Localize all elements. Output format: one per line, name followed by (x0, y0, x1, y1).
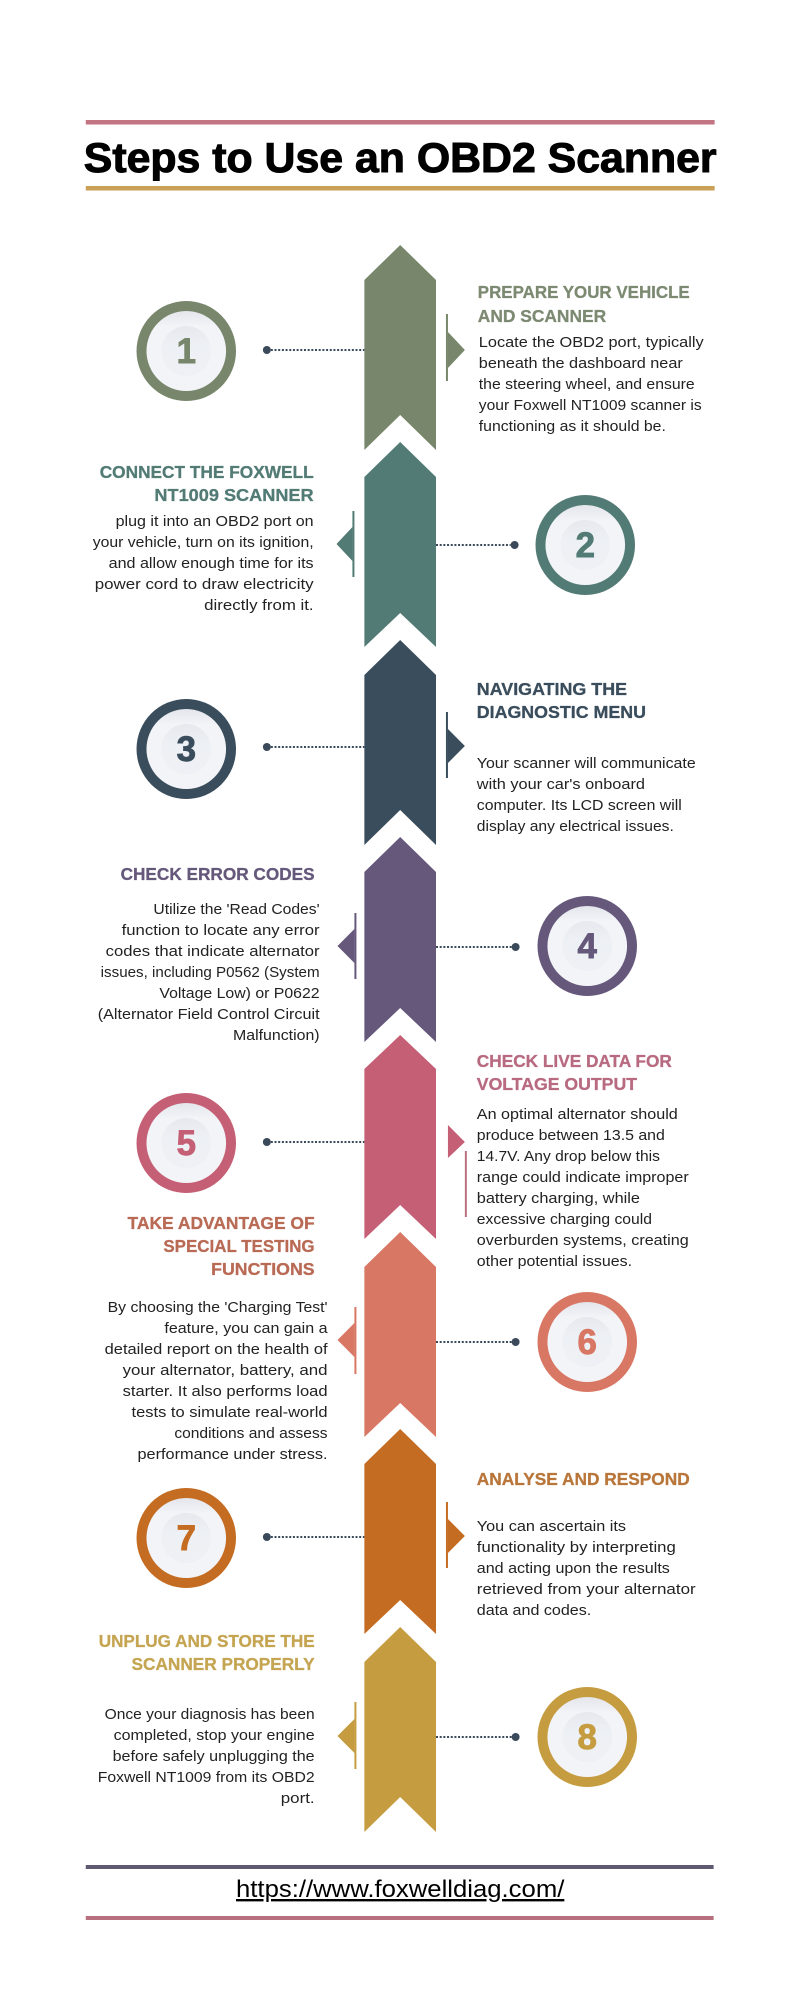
heading 1: PREPARE YOUR VEHICLE (478, 282, 690, 302)
body 8: before safely unplugging the (113, 1748, 315, 1765)
body 8: Once your diagnosis has been (105, 1706, 315, 1723)
body 3: with your car's onboard (476, 776, 645, 793)
number badge 3 (137, 699, 236, 799)
connector 3 (263, 743, 364, 751)
pointer 5 (448, 1125, 467, 1217)
pointer 3 (446, 712, 465, 778)
body 5: other potential issues. (477, 1253, 632, 1270)
body 4: Utilize the 'Read Codes' (153, 901, 320, 918)
body 3 (476, 755, 696, 835)
number badge 8: 8 (578, 1718, 597, 1757)
body 6: detailed report on the health of (105, 1341, 328, 1358)
body 3: display any electrical issues. (477, 818, 674, 835)
body 4: codes that indicate alternator (106, 943, 320, 960)
step 3 panel (137, 640, 696, 845)
body 4: function to locate any error (122, 922, 320, 939)
body 2: plug it into an OBD2 port on (116, 513, 314, 530)
top rule (86, 120, 715, 124)
body 5: An optimal alternator should (477, 1106, 678, 1123)
body 2: directly from it. (204, 597, 314, 614)
body 7: You can ascertain its (477, 1518, 626, 1535)
heading 3: NAVIGATING THE (477, 679, 627, 699)
number badge 7: 7 (177, 1519, 196, 1558)
body 5: overburden systems, creating (477, 1232, 689, 1249)
body 8: completed, stop your engine (114, 1727, 315, 1744)
title: Steps to Use an OBD2 Scanner (84, 134, 717, 181)
body 8: Foxwell NT1009 from its OBD2 (98, 1769, 315, 1786)
connector 2 (436, 541, 519, 549)
body 6: your alternator, battery, and (123, 1362, 328, 1379)
pointer 7 (446, 1502, 465, 1568)
chevron 6 (364, 1232, 436, 1437)
connector 8 (436, 1733, 520, 1741)
body 1: Locate the OBD2 port, typically (479, 334, 704, 351)
number badge 5: 5 (177, 1124, 196, 1163)
body 7: and acting upon the results (477, 1560, 670, 1577)
body 4 (98, 901, 320, 1044)
connector 6 (436, 1338, 520, 1346)
chevron 5 (364, 1035, 436, 1239)
pointer 4 (338, 913, 356, 979)
number badge 1 (137, 301, 236, 401)
body 7 (477, 1518, 696, 1619)
heading 2 (100, 462, 314, 505)
body 6: tests to simulate real-world (132, 1404, 328, 1421)
body 6: By choosing the 'Charging Test' (108, 1299, 328, 1316)
number badge 6 (538, 1292, 637, 1392)
heading 6 (128, 1213, 315, 1279)
body 2: and allow enough time for its (109, 555, 314, 572)
number badge 3: 3 (177, 730, 196, 769)
connector 5 (263, 1138, 364, 1146)
footer bottom rule (86, 1916, 714, 1920)
heading 2: NT1009 SCANNER (154, 485, 314, 505)
heading 8: UNPLUG AND STORE THE (99, 1631, 315, 1651)
infographic content (84, 120, 717, 1920)
connector 4 (436, 943, 520, 951)
body 7: data and codes. (477, 1602, 591, 1619)
body 5: 14.7V. Any drop below this (477, 1148, 660, 1165)
body 5: excessive charging could (477, 1211, 652, 1228)
body 6: starter. It also performs load (123, 1383, 328, 1400)
number badge 6: 6 (578, 1323, 597, 1362)
body 6: feature, you can gain a (164, 1320, 328, 1337)
body 1: beneath the dashboard near (479, 355, 683, 372)
body 5: produce between 13.5 and (477, 1127, 665, 1144)
heading 5: VOLTAGE OUTPUT (477, 1074, 637, 1094)
number badge 7 (137, 1488, 236, 1588)
heading 6: TAKE ADVANTAGE OF (128, 1213, 315, 1233)
connector 1 (263, 346, 364, 354)
heading 8: SCANNER PROPERLY (132, 1654, 315, 1674)
pointer 2 (337, 511, 354, 577)
step 4 panel (98, 837, 637, 1044)
step 8 panel (98, 1627, 637, 1832)
heading 8 (99, 1631, 315, 1674)
pointer 8 (338, 1702, 356, 1769)
step 1 panel (137, 245, 704, 450)
body 4: issues, including P0562 (System (101, 964, 320, 981)
chevron 7 (364, 1429, 436, 1634)
number badge 1: 1 (177, 332, 196, 371)
body 5: battery charging, while (477, 1190, 640, 1207)
header: title block (84, 120, 717, 190)
step 5 panel (137, 1035, 689, 1270)
heading 3 (477, 679, 646, 722)
chevron 1 (364, 245, 436, 450)
body 3: Your scanner will communicate (477, 755, 696, 772)
number badge 2 (536, 495, 635, 595)
number badge 5 (137, 1093, 236, 1193)
body 4: Malfunction) (233, 1027, 320, 1044)
heading 2: CONNECT THE FOXWELL (100, 462, 314, 482)
footer (86, 1865, 714, 1920)
step 2 panel (93, 442, 635, 647)
bottom rule (86, 186, 715, 190)
step 6 panel (105, 1213, 637, 1463)
heading 5: CHECK LIVE DATA FOR (477, 1051, 672, 1071)
heading 3: DIAGNOSTIC MENU (477, 702, 646, 722)
body 4: (Alternator Field Control Circuit (98, 1006, 320, 1023)
body 6: conditions and assess (174, 1425, 328, 1442)
connector 7 (263, 1533, 364, 1541)
heading 1: AND SCANNER (478, 306, 606, 326)
body 7: retrieved from your alternator (477, 1581, 696, 1598)
number badge 2: 2 (576, 526, 595, 565)
heading 7: ANALYSE AND RESPOND (477, 1469, 690, 1489)
heading 6: FUNCTIONS (211, 1259, 315, 1279)
body 7: functionality by interpreting (477, 1539, 676, 1556)
body 1: the steering wheel, and ensure (479, 376, 695, 393)
chevron 3 (364, 640, 436, 845)
body 2: power cord to draw electricity (95, 576, 314, 593)
chevron 2 (364, 442, 436, 647)
number badge 8 (538, 1687, 637, 1787)
heading 4: CHECK ERROR CODES (121, 864, 315, 884)
body 8: port. (281, 1790, 315, 1807)
pointer 1 (446, 314, 465, 381)
body 3: computer. Its LCD screen will (477, 797, 682, 814)
body 5: range could indicate improper (477, 1169, 689, 1186)
body 1: your Foxwell NT1009 scanner is (479, 397, 702, 414)
footer url: https://www.foxwelldiag.com/ (236, 1876, 565, 1903)
step 7 panel (137, 1429, 696, 1634)
number badge 4 (538, 896, 637, 996)
body 6 (105, 1299, 328, 1463)
chevron 4 (364, 837, 436, 1042)
footer top rule (86, 1865, 714, 1869)
chevron 8 (364, 1627, 436, 1832)
body 5 (477, 1106, 689, 1270)
number badge 4: 4 (578, 927, 598, 966)
body 6: performance under stress. (138, 1446, 328, 1463)
heading 5 (477, 1051, 672, 1094)
heading 6: SPECIAL TESTING (163, 1236, 315, 1256)
pointer 6 (338, 1307, 356, 1374)
heading 1 (478, 282, 690, 326)
body 1 (479, 334, 704, 435)
body 4: Voltage Low) or P0622 (159, 985, 320, 1002)
body 2 (93, 513, 314, 614)
body 2: your vehicle, turn on its ignition, (93, 534, 314, 551)
body 8 (98, 1706, 315, 1807)
body 1: functioning as it should be. (479, 418, 666, 435)
